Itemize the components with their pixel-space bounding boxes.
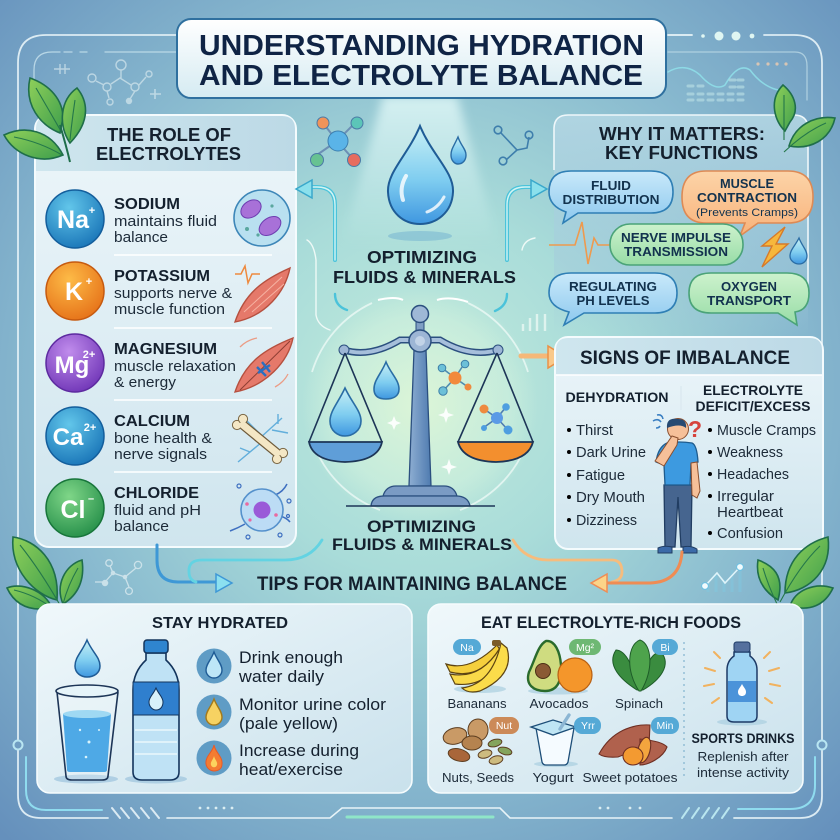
potassium row xyxy=(46,262,290,322)
tip: drink enough water xyxy=(196,648,343,686)
tag xyxy=(489,717,519,734)
bubble: muscle contraction: MUSCLE xyxy=(720,176,774,191)
heading: EAT ELECTROLYTE-RICH FOODS xyxy=(481,614,741,632)
panel heading: THE ROLE OF xyxy=(107,124,231,145)
label: Yogurt xyxy=(532,770,574,785)
bubble: nerve impulse transmission xyxy=(610,224,743,265)
dehydration column xyxy=(566,389,668,529)
panel heading xyxy=(96,124,241,164)
tag xyxy=(574,717,601,734)
scale pillar and base xyxy=(339,306,503,506)
chloride row: CHLORIDE xyxy=(114,485,199,502)
electrolyte deficit or excess column: ELECTROLYTE xyxy=(703,382,803,398)
magnesium row: MAGNESIUM xyxy=(114,341,217,358)
bubble: oxygen transport: TRANSPORT xyxy=(707,293,791,308)
sodium row: Na xyxy=(57,206,90,234)
chloride row: – xyxy=(88,493,94,505)
sodium row: SODIUM xyxy=(114,196,180,213)
icon: leaves bottom left xyxy=(7,537,83,609)
sports drinks text: Replenish after xyxy=(698,749,789,764)
icon: molecule bottom left xyxy=(95,560,142,594)
food: spinach xyxy=(613,640,665,691)
dehydration column: DEHYDRATION xyxy=(566,389,668,405)
chloride row: Cl xyxy=(60,496,86,524)
potassium row: muscle function xyxy=(114,302,225,318)
heading: KEY FUNCTIONS xyxy=(605,142,758,163)
bubble: regulating pH levels: PH LEVELS xyxy=(576,293,650,308)
electrolyte deficit or excess column: DEFICIT/EXCESS xyxy=(696,398,810,414)
label: Sweet potatoes xyxy=(582,770,678,785)
heading: WHY IT MATTERS: xyxy=(599,123,765,144)
heading xyxy=(599,123,765,163)
calcium row: bone health & xyxy=(114,431,212,447)
sodium row xyxy=(46,190,290,248)
tag xyxy=(652,639,678,655)
tip: increase during heat: Increase during xyxy=(239,741,359,760)
tag: Min xyxy=(657,720,674,732)
panel: why it matters xyxy=(549,115,813,335)
panel heading: ELECTROLYTES xyxy=(96,143,241,164)
arrow: to electrolytes panel xyxy=(296,180,347,330)
icon: molecule top left xyxy=(310,117,363,166)
floating molecule xyxy=(438,360,472,395)
icon: balance scale xyxy=(302,287,538,523)
tag: Mg² xyxy=(576,642,595,654)
bubble: muscle contraction: (Prevents Cramps) xyxy=(696,207,798,219)
heading: optimizing fluids and minerals, lower: OPTIMIZING xyxy=(367,517,476,536)
heading: optimizing fluids and minerals, lower: FLUIDS & MINERALS xyxy=(332,535,512,554)
bubble: fluid distribution xyxy=(549,171,673,223)
icon: muscle with pulse xyxy=(235,266,290,322)
tip: drink enough water: water daily xyxy=(238,667,325,686)
dehydration column: Dark Urine xyxy=(576,444,646,461)
tag xyxy=(453,639,481,655)
heading: optimizing fluids and minerals, upper: OPTIMIZING xyxy=(367,247,477,267)
icon: large water drop xyxy=(388,126,453,241)
icon: dizzy person: ? xyxy=(688,416,702,442)
potassium row: supports nerve & xyxy=(114,286,232,302)
right pan with molecule xyxy=(458,353,533,462)
chloride row: balance xyxy=(114,519,169,535)
icon: heartbeat line xyxy=(549,222,612,264)
icon: molecule top right xyxy=(494,126,533,165)
panel: stay hydrated xyxy=(37,604,412,793)
tip: monitor urine color xyxy=(196,694,386,733)
bubble: regulating pH levels: REGULATING xyxy=(569,279,657,294)
chloride row: fluid and pH xyxy=(114,503,201,519)
food: bananas xyxy=(446,640,508,693)
sodium row: + xyxy=(89,205,95,217)
heading: SIGNS OF IMBALANCE xyxy=(580,348,790,369)
magnesium row: muscle relaxation xyxy=(114,359,236,375)
bubble: muscle contraction xyxy=(682,171,813,236)
electrolyte deficit or excess column: Heartbeat xyxy=(717,504,784,521)
tag: Yrr xyxy=(581,720,596,732)
food: avocado and orange xyxy=(528,641,592,694)
food: yogurt xyxy=(531,715,578,767)
arrow: to signs of imbalance xyxy=(521,346,566,368)
calcium row: Ca xyxy=(53,424,84,451)
heading: optimizing fluids and minerals, lower xyxy=(332,517,512,554)
electrolyte deficit or excess column: Irregular xyxy=(717,488,774,505)
icon: falling drop xyxy=(75,640,100,677)
icon: lightning bolt xyxy=(762,227,788,267)
calcium row: CALCIUM xyxy=(114,413,190,430)
icon: small water drop xyxy=(451,137,466,164)
tag xyxy=(651,717,679,734)
bubble: oxygen transport xyxy=(689,273,809,325)
icon: water bottle xyxy=(125,640,187,784)
sodium row: maintains fluid xyxy=(114,214,217,230)
calcium row xyxy=(46,407,288,465)
dehydration column: Dizziness xyxy=(576,512,637,529)
sports drinks text xyxy=(692,731,794,780)
tip: increase during heat: heat/exercise xyxy=(239,760,343,779)
label: Avocados xyxy=(530,696,589,711)
decorative bars near panel xyxy=(523,314,545,331)
title: AND ELECTROLYTE BALANCE xyxy=(199,60,643,92)
bubble: fluid distribution: FLUID xyxy=(591,178,631,193)
sports drinks text: SPORTS DRINKS xyxy=(692,731,794,746)
magnesium row: Mg xyxy=(55,352,89,379)
light beam behind water drop xyxy=(342,96,498,245)
title xyxy=(177,19,666,98)
magnesium row: 2+ xyxy=(83,349,95,361)
tag: Na xyxy=(460,642,474,654)
icon: cell xyxy=(234,190,290,246)
tag: Bi xyxy=(660,642,670,654)
icon: leaves top right xyxy=(774,85,835,152)
icon: bone and nerves xyxy=(232,414,288,464)
bubble: regulating pH levels xyxy=(549,273,677,325)
tip: monitor urine color: Monitor urine color xyxy=(239,695,386,714)
calcium row: 2+ xyxy=(84,422,96,434)
icon: glass of water xyxy=(54,685,118,784)
food: nuts and seeds xyxy=(441,719,513,766)
dehydration column: Thirst xyxy=(576,422,614,439)
icon: relaxing muscle xyxy=(235,338,293,392)
tip: increase during heat xyxy=(196,740,359,779)
arrow: electrolytes to tips xyxy=(157,540,322,592)
dehydration column: Dry Mouth xyxy=(576,489,645,506)
heading: tips for maintaining balance: TIPS FOR MAINTAINING BALANCE xyxy=(257,574,567,595)
potassium row: K xyxy=(65,278,83,306)
potassium row: POTASSIUM xyxy=(114,268,210,285)
sports drinks text: intense activity xyxy=(697,765,790,780)
label: Spinach xyxy=(615,696,663,711)
icon: trend line bottom right xyxy=(702,564,743,592)
tip: monitor urine color: (pale yellow) xyxy=(239,714,338,733)
floating drop xyxy=(374,362,399,399)
bubble: nerve impulse transmission: NERVE IMPULSE xyxy=(621,230,731,245)
decorative molecule top left xyxy=(54,60,161,105)
potassium row: + xyxy=(86,276,92,288)
electrolyte deficit or excess column: Weakness xyxy=(717,444,783,461)
calcium row: nerve signals xyxy=(114,447,207,463)
dehydration column: Fatigue xyxy=(576,467,625,484)
panel: eat electrolyte-rich foods xyxy=(428,604,803,793)
icon: sports drink bottle xyxy=(704,642,780,726)
tip: drink enough water: Drink enough xyxy=(239,648,343,667)
tag: Nut xyxy=(496,720,512,732)
bubble: oxygen transport: OXYGEN xyxy=(721,279,777,294)
food: sweet potatoes xyxy=(599,725,667,765)
electrolyte deficit or excess column: Headaches xyxy=(717,466,789,483)
magnesium row: & energy xyxy=(114,375,177,391)
heading: optimizing fluids and minerals, upper: FLUIDS & MINERALS xyxy=(333,267,516,287)
icon: leaves top left xyxy=(4,78,86,162)
left pan with drop xyxy=(309,353,382,462)
icon: neuron cell xyxy=(230,484,291,539)
heading: optimizing fluids and minerals, upper xyxy=(333,247,516,287)
bubble: muscle contraction: CONTRACTION xyxy=(697,190,797,205)
tag xyxy=(569,639,601,655)
arrow: signs to tips xyxy=(513,540,682,592)
electrolyte deficit or excess column xyxy=(696,382,816,542)
label: Nuts, Seeds xyxy=(442,770,514,785)
bubble: nerve impulse transmission: TRANSMISSION xyxy=(624,244,728,259)
bubble: fluid distribution: DISTRIBUTION xyxy=(562,192,660,207)
arrow: to key functions panel xyxy=(495,180,547,311)
icon: leaves bottom right xyxy=(757,537,833,608)
heading: STAY HYDRATED xyxy=(152,615,288,632)
sodium row: balance xyxy=(114,230,168,246)
panel: signs of imbalance xyxy=(555,337,823,553)
electrolyte deficit or excess column: Muscle Cramps xyxy=(717,422,816,439)
icon: dizzy person xyxy=(653,415,702,553)
title: UNDERSTANDING HYDRATION xyxy=(199,30,644,62)
electrolyte deficit or excess column: Confusion xyxy=(717,525,783,542)
magnesium row xyxy=(46,334,293,392)
label: Bananans xyxy=(448,696,507,711)
chloride row xyxy=(46,479,291,539)
icon: small drop xyxy=(790,238,807,264)
